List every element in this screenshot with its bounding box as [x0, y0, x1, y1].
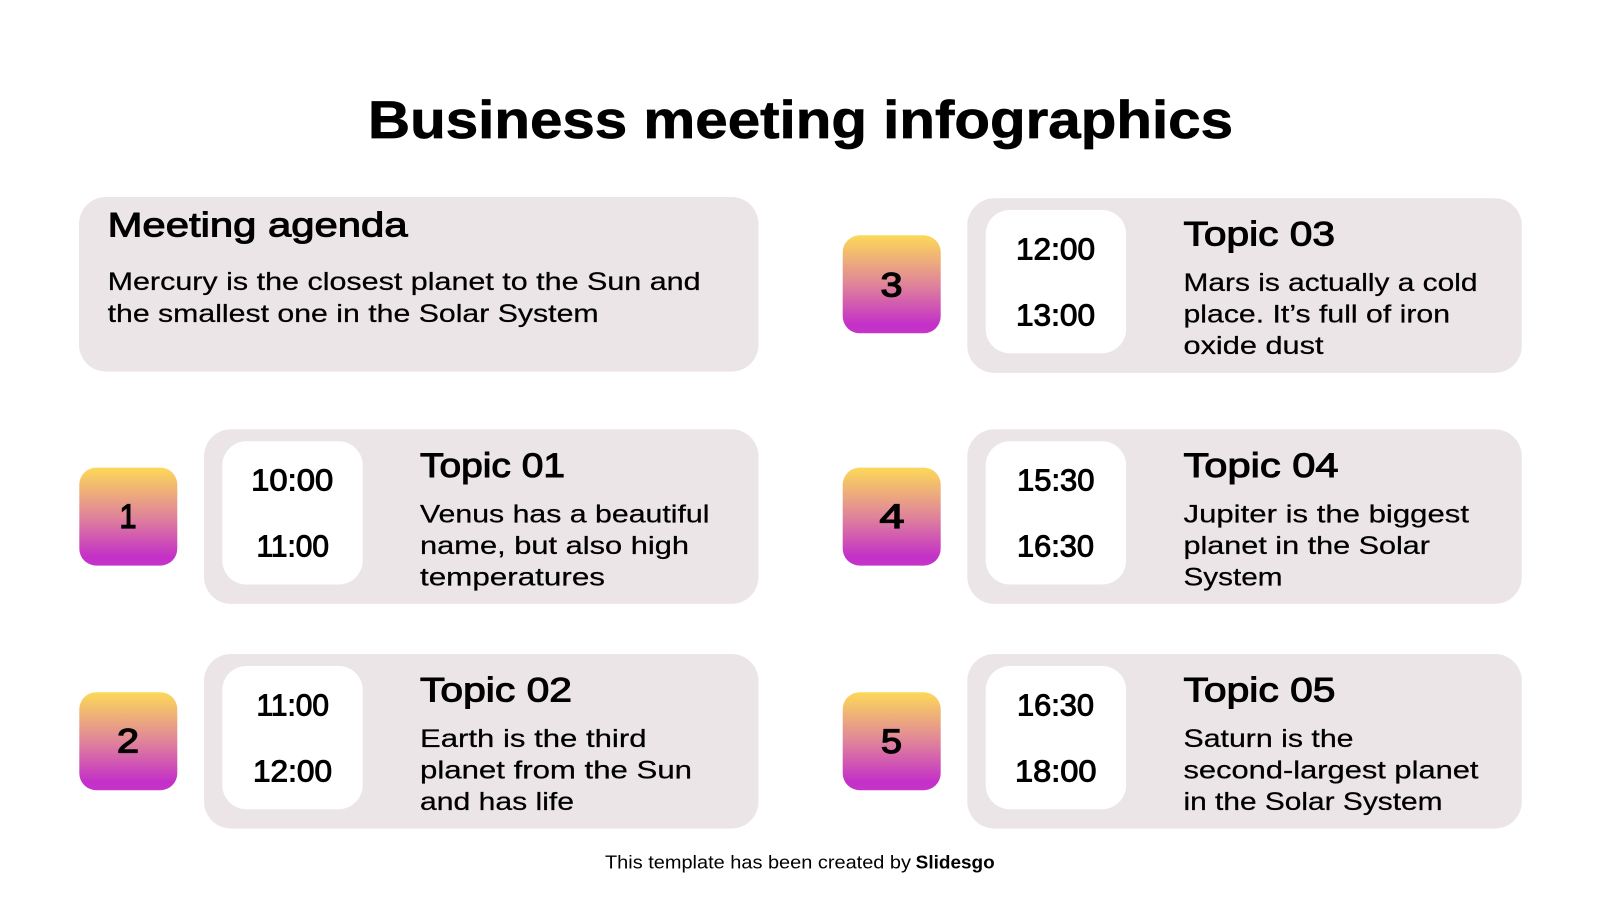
time box: 10:00 [251, 464, 333, 498]
footer credit: This template has been created by [605, 852, 911, 872]
text: topic 02 description: Earth is the third [420, 725, 646, 753]
text: topic 02 description: and has life [420, 788, 574, 816]
text: topic 04 description [1184, 500, 1469, 591]
text: topic 01 description [420, 500, 710, 591]
number tile 5 [843, 692, 941, 790]
time box: 16:30 [1017, 530, 1094, 564]
number tile 2: 2 [117, 723, 139, 761]
text: topic 01 description: Venus has a beautiful [420, 500, 710, 528]
text: topic 03 description [1184, 269, 1478, 360]
heading: topic 03: Topic 03 [1184, 216, 1335, 254]
text: topic 05 description [1184, 725, 1479, 816]
time box [222, 441, 363, 584]
heading: topic 04: Topic 04 [1184, 447, 1338, 485]
number tile 4: 4 [880, 498, 904, 536]
text: topic 01 description: name, but also high [420, 532, 689, 560]
time box [986, 210, 1126, 353]
text: topic 03 description: place. It’s full of iron [1184, 301, 1450, 329]
topic 4 row [843, 429, 1522, 604]
title: Business meeting infographics [368, 91, 1233, 150]
text: topic 02 description: planet from the Sun [420, 757, 692, 785]
text: topic 05 description: Saturn is the [1184, 725, 1354, 753]
text: topic 04 description: planet in the Solar [1184, 532, 1430, 560]
time box [986, 666, 1126, 809]
time box: 12:00 [253, 754, 332, 788]
text: topic 05 description: second-largest planet [1184, 757, 1479, 785]
heading: topic 05: Topic 05 [1184, 672, 1336, 710]
number tile 5: 5 [881, 723, 902, 761]
time box [986, 441, 1126, 584]
number tile 2 [79, 692, 177, 790]
time box: 18:00 [1015, 754, 1096, 788]
panel: meeting agenda [79, 197, 758, 372]
number tile 4 [843, 468, 941, 566]
panel: topic 03 [967, 198, 1522, 373]
heading: meeting agenda: Meeting agenda [108, 207, 408, 245]
number tile 1 [79, 468, 177, 566]
time box: 15:30 [1017, 464, 1094, 498]
panel: topic 05 [967, 654, 1522, 829]
time box: 12:00 [1016, 232, 1095, 266]
topic 3 row [843, 198, 1522, 373]
text: topic 01 description: temperatures [420, 563, 605, 591]
text: topic 04 description: System [1184, 563, 1282, 591]
time box: 11:00 [256, 688, 329, 722]
text: agenda description: the smallest one in the Solar System [108, 300, 599, 328]
panel: topic 02 [204, 654, 758, 829]
text: agenda description [108, 268, 701, 328]
time box [222, 666, 363, 809]
time box: 16:30 [1017, 688, 1094, 722]
time box: 11:00 [256, 530, 329, 564]
panel: topic 01 [204, 429, 758, 604]
text: topic 03 description: Mars is actually a cold [1184, 269, 1478, 297]
number tile 3 [843, 235, 941, 333]
heading: topic 01: Topic 01 [420, 447, 565, 485]
text: topic 04 description: Jupiter is the biggest [1184, 500, 1469, 528]
heading: topic 02: Topic 02 [420, 672, 572, 710]
text: agenda description: Mercury is the closest planet to the Sun and [108, 268, 701, 296]
topic 2 row [79, 654, 759, 829]
time box: 13:00 [1016, 298, 1095, 332]
text: topic 05 description: in the Solar System [1184, 788, 1442, 816]
topic 1 row [79, 429, 759, 604]
panel: topic 04 [967, 429, 1522, 604]
footer credit: Slidesgo [916, 852, 995, 872]
topic 5 row [843, 654, 1522, 829]
text: topic 03 description: oxide dust [1184, 332, 1324, 360]
number tile 3: 3 [880, 266, 902, 304]
text: topic 02 description [420, 725, 692, 816]
number tile 1: 1 [120, 498, 136, 536]
